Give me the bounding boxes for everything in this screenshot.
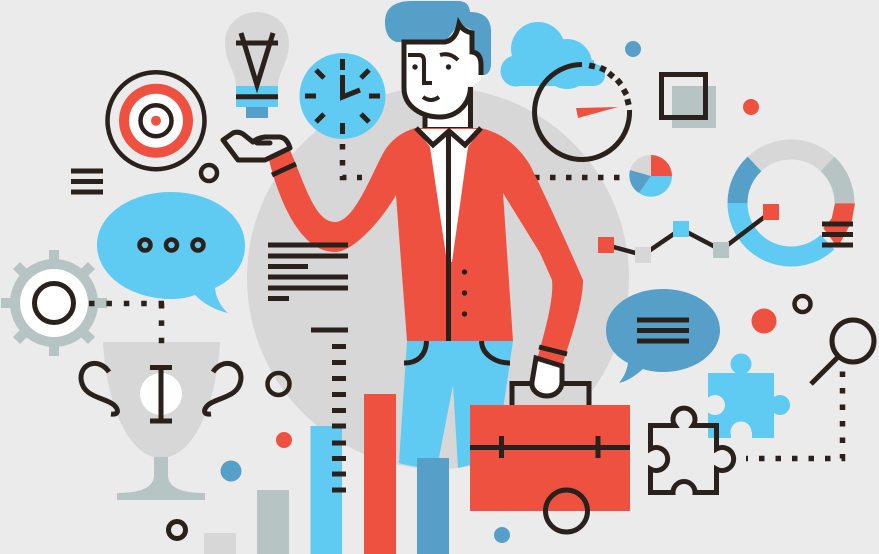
figure: businessman	[223, 1, 583, 468]
icon: target	[108, 72, 204, 169]
dotted connector: clock to figure	[342, 144, 362, 178]
menu icon	[71, 171, 103, 192]
dotted connector: magnifier to puzzle	[746, 372, 842, 458]
hair	[385, 1, 491, 75]
text lines	[268, 245, 348, 298]
icon: gear	[1, 250, 107, 356]
small ring	[201, 165, 217, 181]
small ring	[268, 373, 290, 395]
pockets	[404, 341, 510, 363]
jacket	[269, 128, 583, 366]
pie chart	[629, 155, 672, 197]
dotted connector: gear to trophy	[89, 303, 164, 355]
trousers	[399, 341, 513, 468]
donut menu lines	[822, 224, 853, 245]
icon: trophy	[81, 342, 241, 500]
right cuff	[539, 347, 567, 354]
blue dot	[220, 460, 242, 482]
donut chart	[738, 150, 855, 256]
thumb	[257, 140, 270, 146]
bar chart	[204, 394, 449, 554]
head	[404, 24, 481, 129]
red dot	[276, 432, 292, 448]
small ring	[794, 296, 810, 312]
right hand	[532, 358, 562, 396]
left cuff	[272, 164, 296, 175]
icon: magnifier	[811, 320, 874, 384]
face details	[408, 54, 458, 100]
head outline	[404, 24, 481, 130]
icon: cloud	[500, 22, 605, 89]
blue dot	[494, 527, 510, 543]
blue dot	[625, 41, 641, 57]
background circle	[247, 87, 629, 469]
icon: outline puzzle piece	[650, 408, 734, 492]
ruler ticks	[311, 330, 348, 490]
icon: light bulb	[225, 12, 289, 118]
collar and placket	[416, 128, 481, 341]
icon: clock	[300, 53, 386, 139]
speech bubble: light blue	[97, 192, 245, 313]
icon: briefcase	[470, 405, 630, 532]
icon: stopwatch	[535, 62, 632, 160]
jacket buttons	[462, 269, 467, 317]
speech bubble: dark blue	[606, 289, 720, 383]
red dot	[743, 99, 759, 115]
dotted connector: figure to pie	[534, 175, 622, 180]
briefcase handle	[512, 384, 589, 405]
icon: blue puzzle piece	[700, 354, 790, 442]
red dot	[752, 308, 776, 334]
small ring	[168, 522, 186, 538]
left hand	[223, 132, 290, 160]
shirt	[416, 129, 481, 262]
line chart	[598, 204, 779, 263]
icon: squares	[662, 74, 716, 128]
